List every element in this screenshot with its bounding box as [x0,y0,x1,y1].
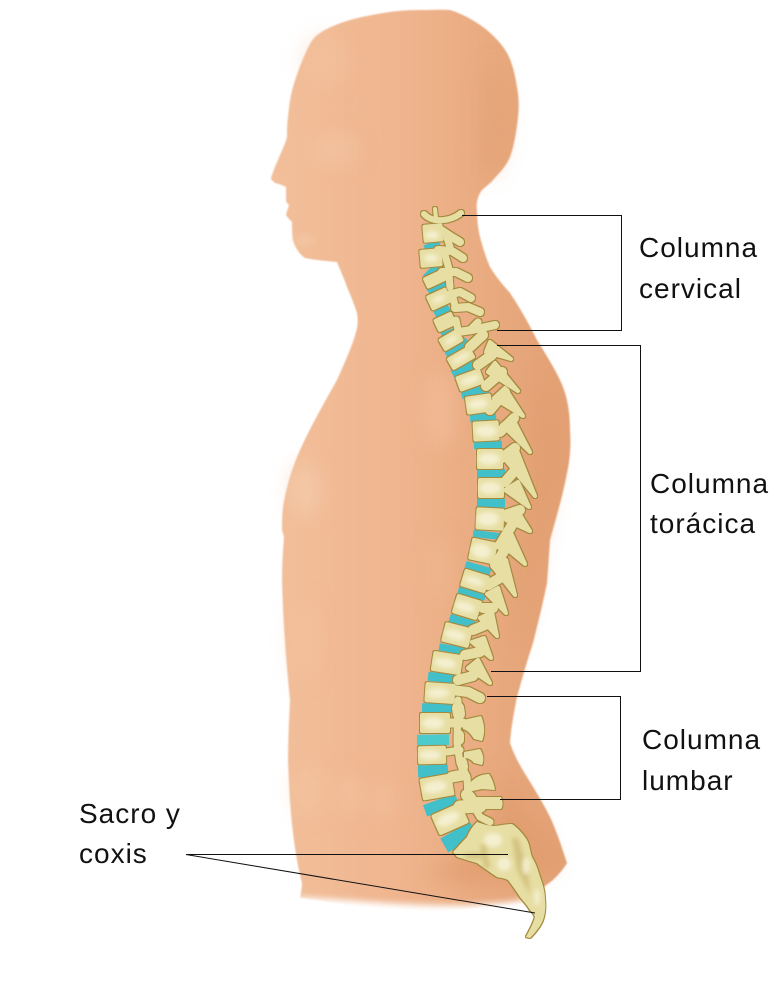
lumbar spinous plates [463,716,484,741]
leader lines: columna cervical [462,216,622,330]
leader lines: sacro y coxis [186,854,535,913]
lumbar processes [447,690,490,822]
leader lines: columna torácica [491,346,640,672]
label: columna lumbar: Columna [642,724,761,755]
cervical spinous processes [438,228,495,332]
bone highlights [419,231,540,905]
lumbar vertebral bodies [418,682,469,836]
leader lines: columna lumbar [487,696,620,800]
intervertebral discs [417,239,505,852]
faded bottom edge of body [280,897,600,960]
label: columna cervical: cervical [639,273,742,304]
shading: darker back [420,60,555,885]
sacrum and coccyx [453,822,545,938]
bone shadows [464,838,530,895]
shading: light front highlights [291,36,454,818]
atlas [424,209,461,220]
label: sacro y coxis: Sacro y [79,798,181,829]
spine [417,209,545,938]
thoracic pedicles and facets [458,335,520,680]
chin highlight [293,233,317,247]
label: columna lumbar: lumbar [642,765,734,796]
cervical and thoracic vertebral bodies [419,223,505,675]
label: sacro y coxis: coxis [79,838,148,869]
thoracic spinous processes [468,342,535,683]
human body silhouette [271,10,570,912]
bones: vertebrae, processes, sacrum [418,209,545,938]
label: columna torácica: torácica [650,508,756,539]
label: columna cervical: Columna [639,232,758,263]
label: columna torácica: Columna [650,468,769,499]
